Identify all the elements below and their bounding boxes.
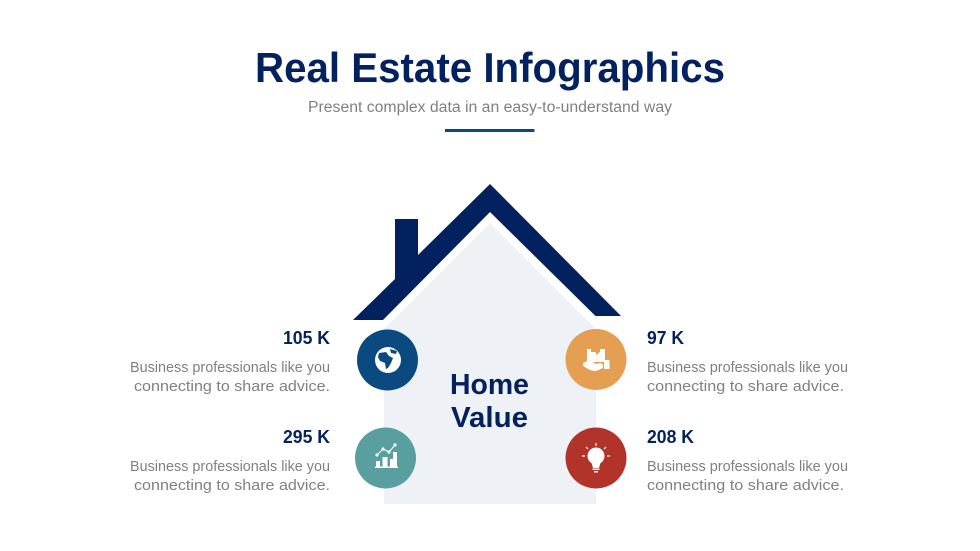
item: 97 K: Business professionals like you xyxy=(647,359,848,376)
item: 97 K: 97 K xyxy=(647,328,684,348)
item: 295 K: connecting to share advice. xyxy=(134,477,330,494)
icon: globe xyxy=(357,330,418,390)
house roof with chimney xyxy=(353,184,621,320)
item: 208 K: connecting to share advice. xyxy=(647,477,844,494)
item: 97 K: connecting to share advice. xyxy=(647,378,844,395)
item: 295 K: Business professionals like you xyxy=(130,458,330,475)
house body xyxy=(384,223,596,504)
item: 208 K: Business professionals like you xyxy=(647,458,848,475)
item: 105 K: Business professionals like you xyxy=(130,359,330,376)
item: 295 K xyxy=(130,427,330,494)
title underline xyxy=(445,129,534,132)
icon: hand holding building xyxy=(566,329,626,390)
item: 208 K xyxy=(647,427,848,494)
subtitle: Present complex data in an easy-to-understand way xyxy=(308,99,672,116)
item: 105 K: 105 K xyxy=(283,328,330,348)
item: 295 K: 295 K xyxy=(283,427,330,447)
house label: Home xyxy=(450,369,529,401)
icon: light bulb xyxy=(566,428,626,488)
title: Real Estate Infographics xyxy=(255,44,725,91)
house label xyxy=(450,369,529,434)
house label: Value xyxy=(451,402,528,434)
icon: growth chart xyxy=(355,428,416,488)
item: 208 K: 208 K xyxy=(647,427,694,447)
item: 105 K: connecting to share advice. xyxy=(134,378,330,395)
item: 97 K xyxy=(647,328,848,395)
item: 105 K xyxy=(130,328,330,395)
